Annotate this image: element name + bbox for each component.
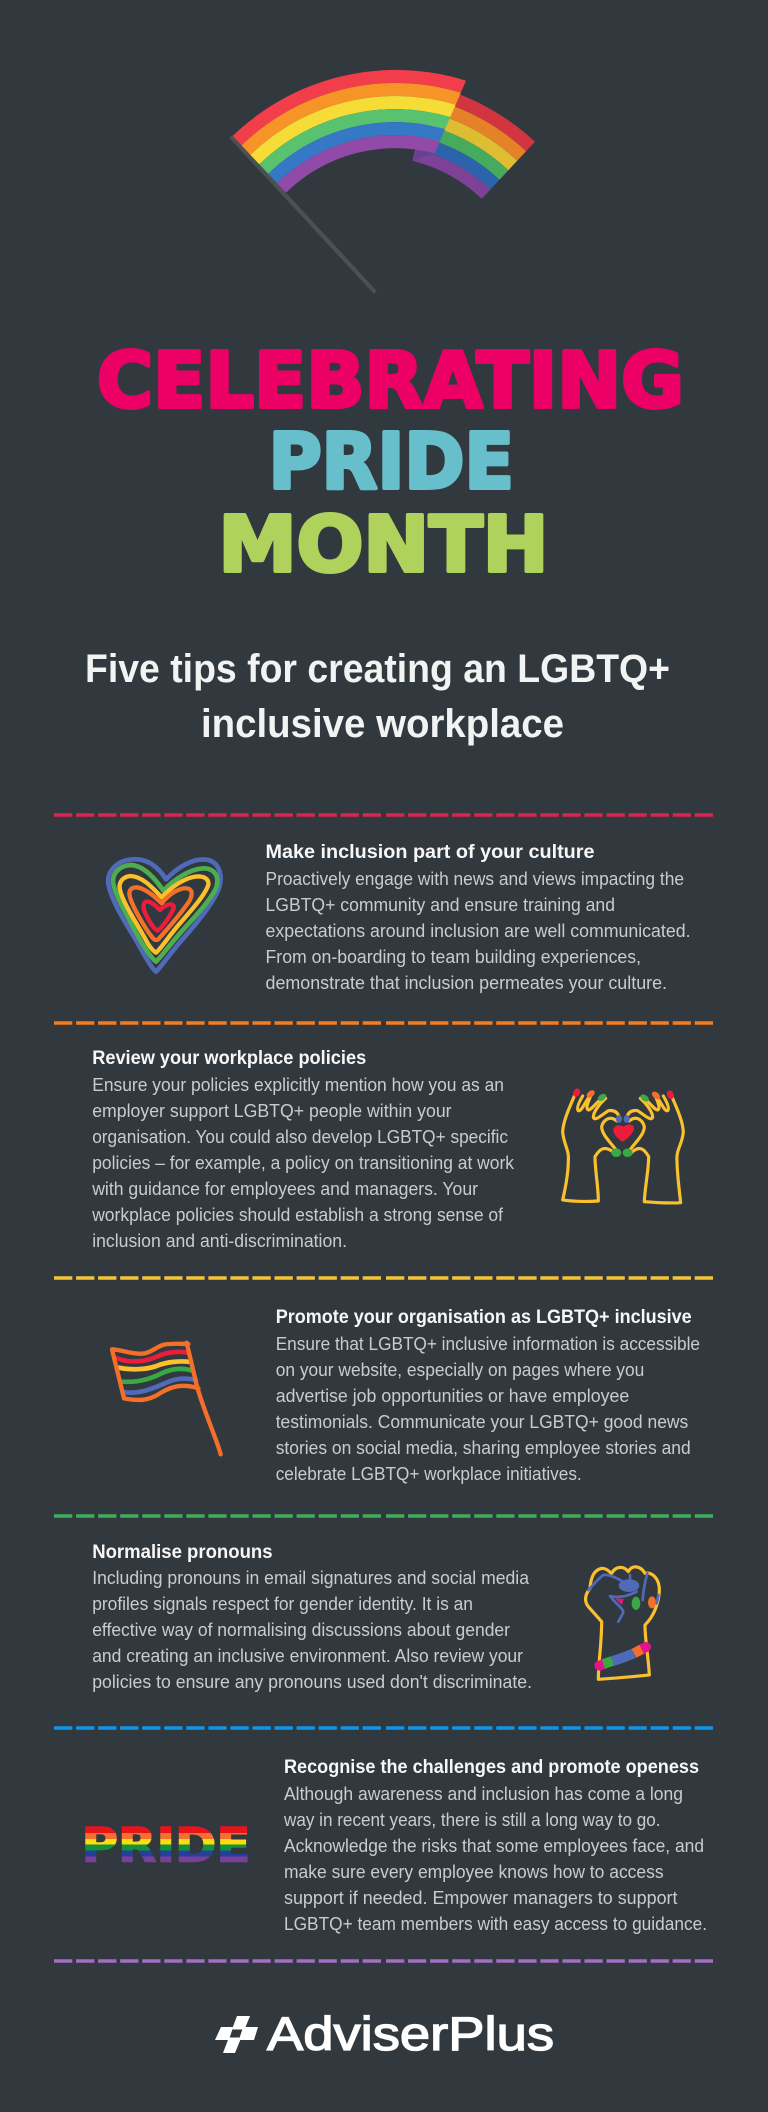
text: tip 2: inclusion and anti-discrimination. (92, 1230, 347, 1251)
text: tip 3: testimonials. Communicate your LGBTQ+ good news (276, 1411, 688, 1432)
subtitle: Five tips for creating an LGBTQ+ (85, 647, 670, 691)
text: tip 2: organisation. You could also develop LGBTQ+ specific (92, 1126, 508, 1147)
text: tip 1 (266, 841, 690, 993)
wordmark: AdviserPlus (267, 2007, 554, 2060)
text: tip 2: Ensure your policies explicitly mention how you as an (92, 1074, 504, 1095)
panel: tip 3 promote (112, 1306, 700, 1484)
text: tip 2: Review your workplace policies (92, 1047, 366, 1069)
text: tip 3: Ensure that LGBTQ+ inclusive information is accessible (276, 1333, 700, 1354)
text: tip 2: with guidance for employees and managers. Your (91, 1178, 478, 1199)
title: MONTH (218, 501, 548, 590)
icon: logo cross (215, 2016, 258, 2053)
icon: raised fist with bracelet (586, 1567, 659, 1679)
text: tip 4 (92, 1541, 532, 1692)
text: tip 4: Normalise pronouns (92, 1541, 273, 1563)
text: tip 3: on your website, especially on pages where you (276, 1359, 644, 1380)
text: tip 5: make sure every employee knows how to access (284, 1861, 664, 1882)
text: tip 2: policies – for example, a policy on transitioning at work (92, 1152, 515, 1173)
text: tip 1: From on-boarding to team building experiences, (266, 946, 641, 967)
text: tip 5: Recognise the challenges and promote openess (284, 1756, 699, 1778)
icon: hand drawn pride flag (112, 1343, 221, 1454)
text: tip 5: support if needed. Empower managers to support (284, 1887, 678, 1908)
text: tip 4: and creating an inclusive environment. Also review your (92, 1645, 523, 1666)
icon: rainbow flag (229, 70, 535, 294)
text: tip 3: stories on social media, sharing employee stories and (276, 1437, 691, 1458)
text: tip 5: Although awareness and inclusion has come a long (284, 1783, 683, 1804)
icon: rainbow PRIDE wordmark: PRIDE (82, 1819, 250, 1874)
text: tip 5: Acknowledge the risks that some employees face, and (284, 1835, 704, 1856)
text: tip 2: employer support LGBTQ+ people within your (92, 1100, 452, 1121)
text: tip 2: workplace policies should establish a strong sense of (91, 1204, 504, 1225)
text: tip 1: Make inclusion part of your culture (266, 841, 595, 863)
logo: AdviserPlus (215, 2007, 554, 2060)
text: tip 3 (276, 1306, 700, 1484)
text: tip 4: policies to ensure any pronouns used don't discriminate. (92, 1671, 532, 1692)
text: tip 2 (91, 1047, 515, 1251)
text: tip 1: demonstrate that inclusion permeates your culture. (266, 972, 667, 993)
panel: tip 1 culture (108, 841, 690, 993)
title: CELEBRATING (97, 337, 684, 426)
text: tip 3: advertise job opportunities or have employee (276, 1385, 629, 1406)
title: PRIDE (269, 418, 514, 507)
text: tip 4: Including pronouns in email signatures and social media (92, 1567, 530, 1588)
text: tip 4: effective way of normalising discussions about gender (92, 1619, 510, 1640)
text: tip 1: expectations around inclusion are well communicated. (266, 920, 690, 941)
text: tip 3: Promote your organisation as LGBTQ+ inclusive (276, 1306, 692, 1328)
text: tip 4: profiles signals respect for gender identity. It is an (92, 1593, 473, 1614)
panel: tip 4 pronouns (92, 1541, 659, 1692)
icon: rainbow heart (108, 859, 221, 972)
title (97, 337, 684, 590)
subtitle (85, 647, 670, 746)
text: tip 5 (283, 1756, 707, 1934)
icon: hands forming heart (563, 1087, 683, 1203)
text: tip 3: celebrate LGBTQ+ workplace initiatives. (276, 1463, 582, 1484)
text: tip 5: LGBTQ+ team members with easy access to guidance. (284, 1913, 707, 1934)
panel: tip 5 openness (82, 1756, 707, 1934)
text: tip 5: way in recent years, there is still a long way to go. (283, 1809, 660, 1830)
text: tip 1: Proactively engage with news and views impacting the (266, 868, 684, 889)
text: tip 1: LGBTQ+ community and ensure training and (266, 894, 615, 915)
panel: tip 2 policies (91, 1047, 683, 1251)
subtitle: inclusive workplace (201, 702, 564, 746)
